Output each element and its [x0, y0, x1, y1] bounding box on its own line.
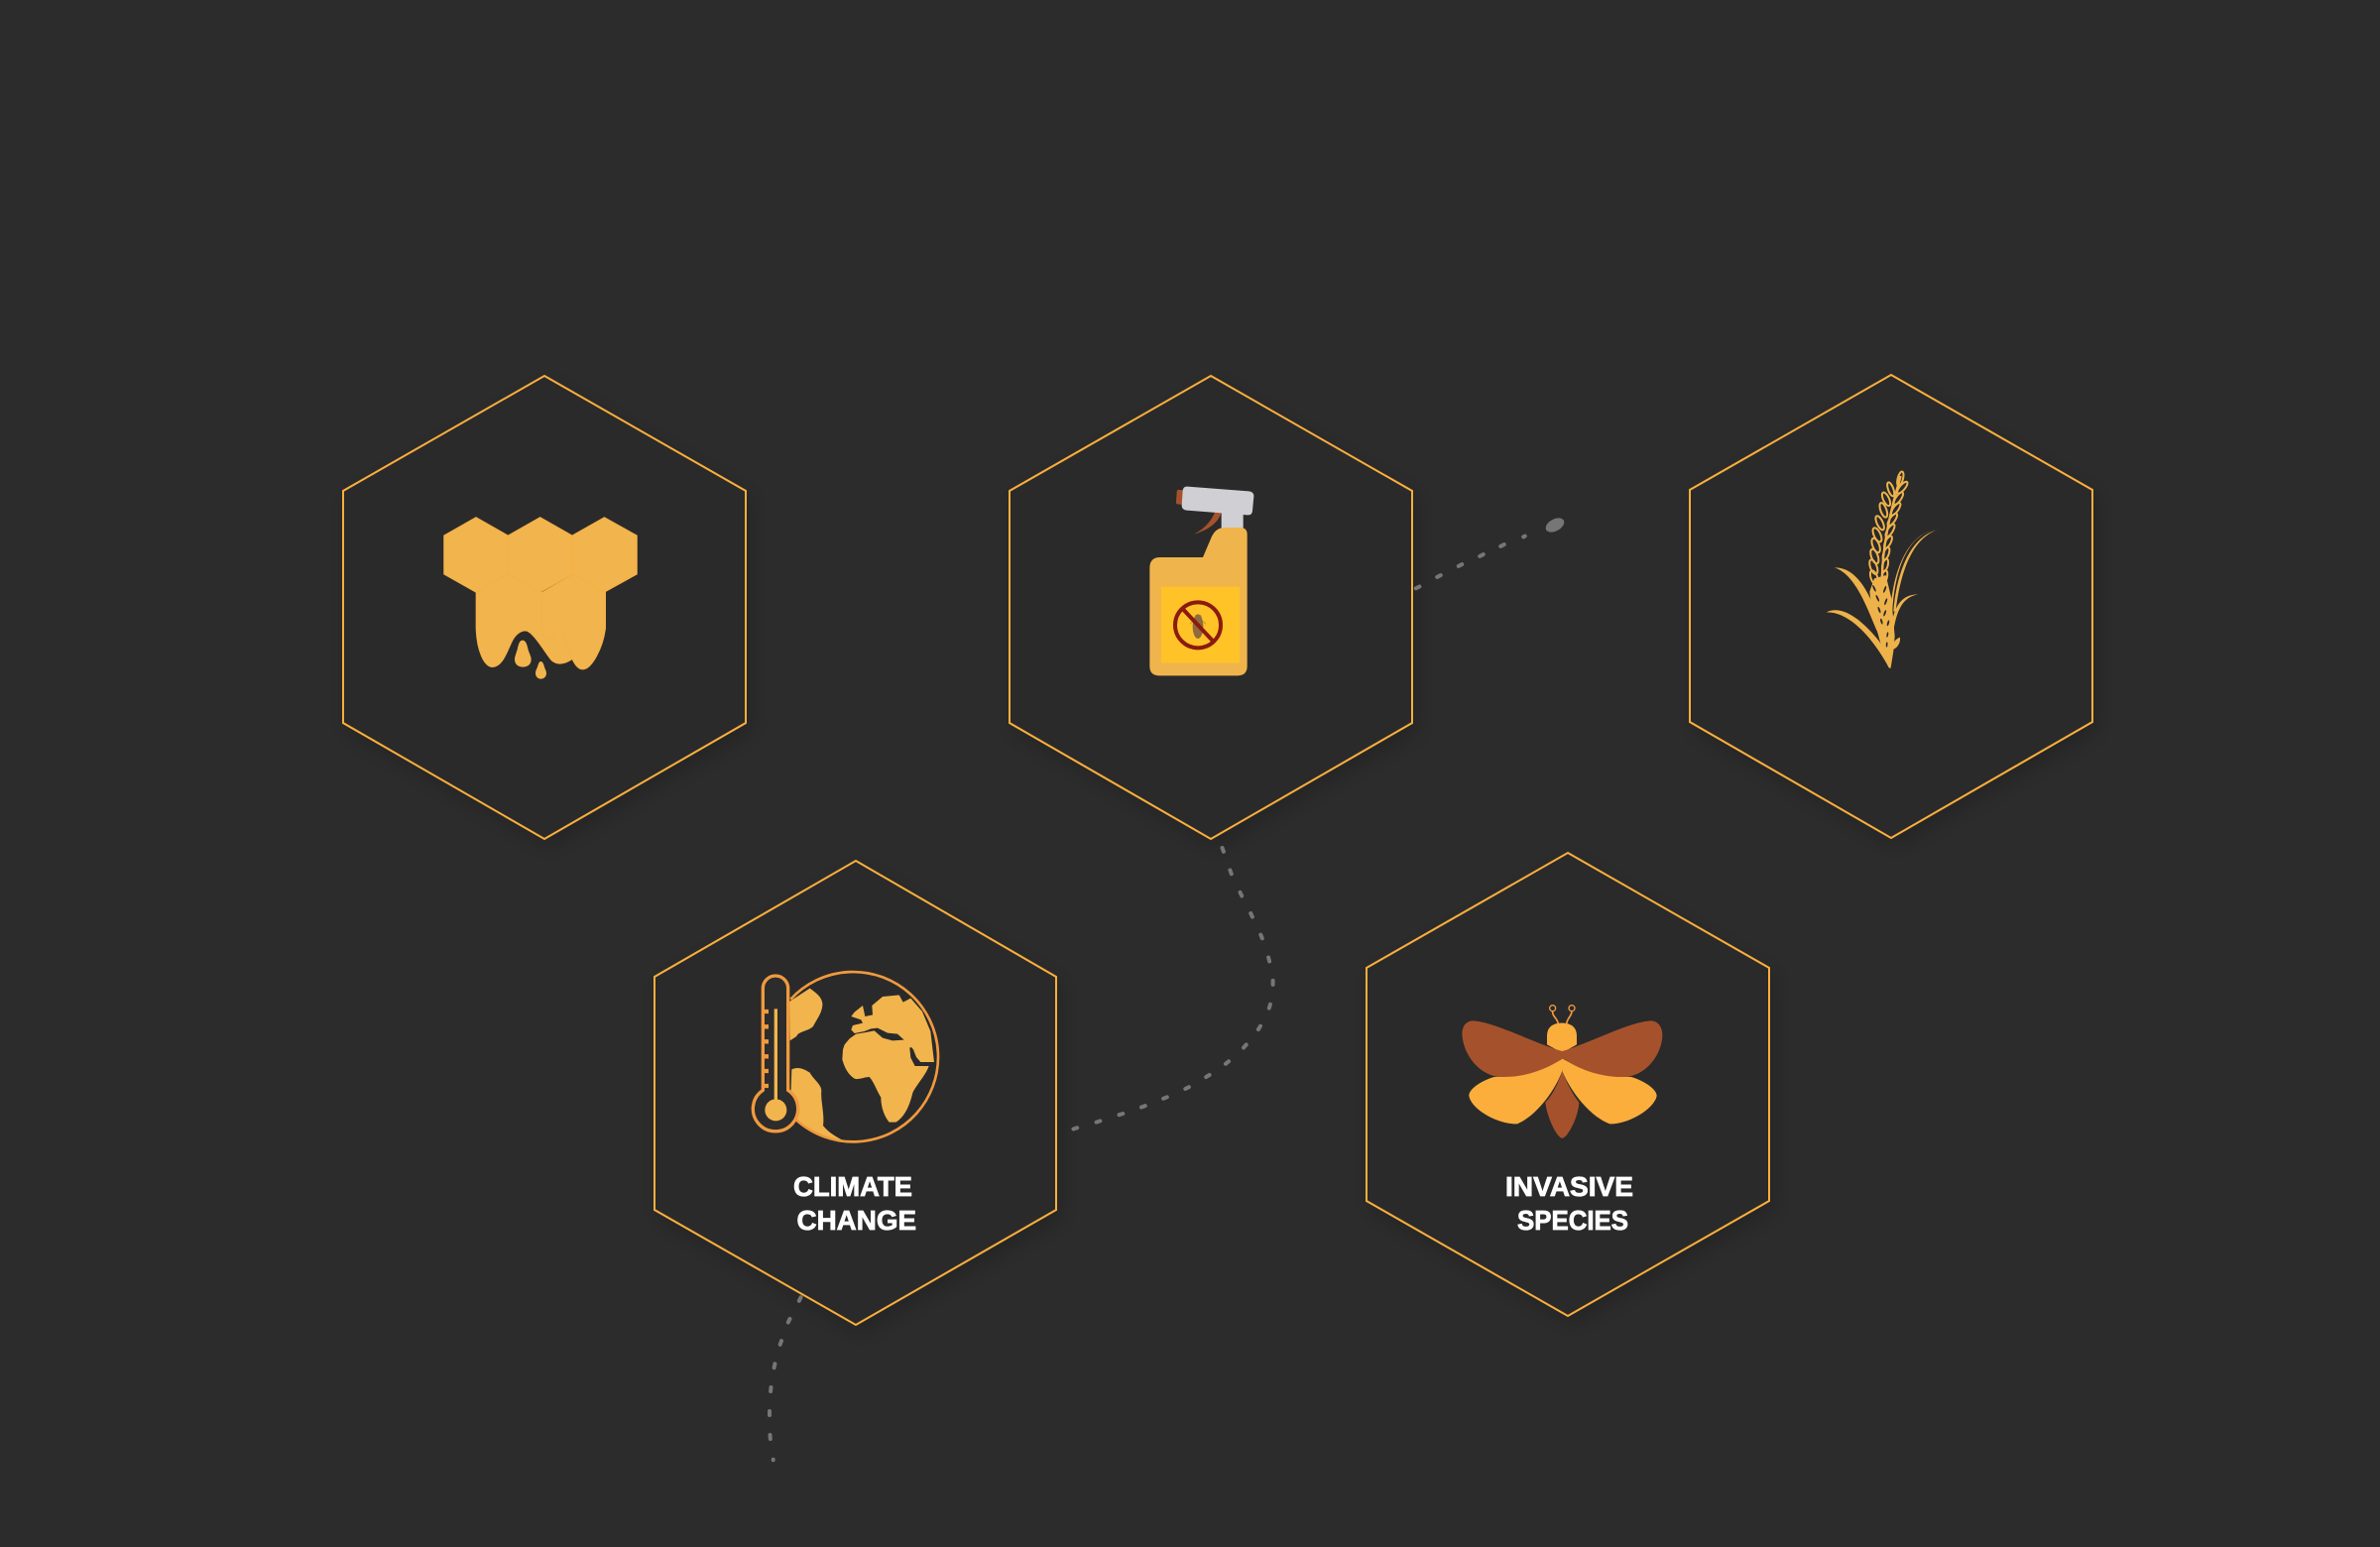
panel: monoculture	[1690, 375, 2092, 838]
label: climate change: CHANGE	[797, 1205, 916, 1236]
icon: wheat plant	[1827, 471, 1939, 668]
icon: spray bottle	[1149, 487, 1253, 675]
panel: honeycomb	[343, 376, 746, 839]
label: invasive species: INVASIVE	[1505, 1171, 1633, 1202]
dotted bee path: pesticide hexagon to climate hexagon	[1073, 848, 1273, 1129]
label: invasive species: SPECIES	[1517, 1205, 1628, 1236]
icon: moth	[1462, 1006, 1662, 1138]
icon: dripping honeycomb	[444, 518, 637, 679]
label: climate change: CLIMATE	[793, 1171, 912, 1202]
label: climate change	[793, 1171, 916, 1236]
panel: pesticides	[1010, 376, 1412, 839]
label: invasive species	[1505, 1171, 1633, 1236]
icon: thermometer and globe	[753, 972, 938, 1141]
dotted bee path: climate hexagon downward	[770, 1297, 801, 1460]
panel: invasive species	[1367, 853, 1769, 1316]
panel: climate change	[654, 861, 1056, 1325]
dotted bee path: pesticide hexagon to bee	[1416, 516, 1567, 588]
